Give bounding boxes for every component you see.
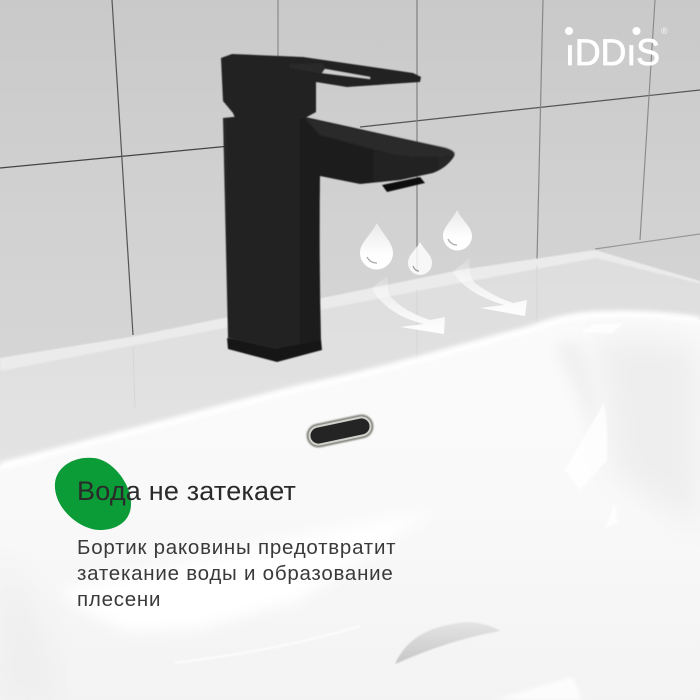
- drop 2: [408, 242, 432, 275]
- faucet base: [227, 338, 322, 362]
- description text: [77, 536, 396, 611]
- drop 1: [360, 223, 393, 270]
- drop 3: [443, 210, 472, 250]
- description text: затекание воды и образование: [77, 562, 394, 585]
- description text: Бортик раковины предотвратит: [77, 536, 396, 559]
- aerator: [382, 177, 425, 192]
- handle slot shadow: [288, 63, 326, 74]
- description text: плесени: [77, 588, 161, 611]
- faucet body and spout: [223, 117, 454, 349]
- faucet: [221, 54, 454, 362]
- arrow left: [372, 275, 445, 334]
- logo: ®: [661, 26, 668, 36]
- water drops: [360, 210, 472, 275]
- spout top face: [305, 118, 454, 157]
- logo dots: [565, 27, 640, 35]
- washbasin: [0, 250, 700, 700]
- green blob: [55, 458, 131, 530]
- arrows: [372, 257, 527, 334]
- logo: ıDDıS: [565, 32, 660, 73]
- handle loop opening: [322, 69, 370, 79]
- overflow hole: [304, 412, 376, 450]
- tiled wall: [0, 0, 700, 380]
- faucet handle: [221, 54, 421, 118]
- arrow right: [453, 257, 527, 316]
- drain: [395, 622, 500, 664]
- heading: Вода не затекает: [77, 476, 296, 506]
